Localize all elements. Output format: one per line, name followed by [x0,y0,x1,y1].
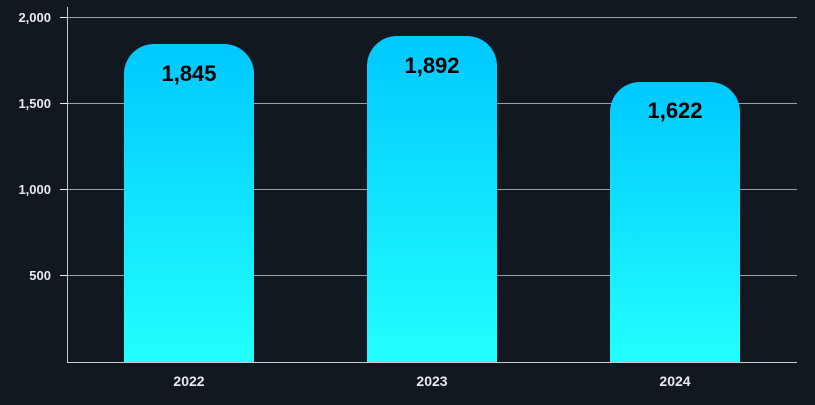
y axis labels [18,10,51,283]
x axis labels [173,373,691,389]
y axis labels: 1,000 [18,182,51,197]
x axis labels: 2022 [173,373,205,389]
bar: 2022: 1,845 [161,61,217,86]
bar: 2022 [124,44,254,362]
bar: 2023 [367,36,497,362]
y axis labels: 500 [29,268,51,283]
x axis labels: 2023 [416,373,448,389]
y axis labels: 2,000 [18,10,51,25]
bar: 2024: 1,622 [647,98,703,123]
bar: 2023: 1,892 [404,53,460,78]
y axis labels: 1,500 [18,96,51,111]
x axis labels: 2024 [659,373,691,389]
bar: 2024 [610,82,740,362]
